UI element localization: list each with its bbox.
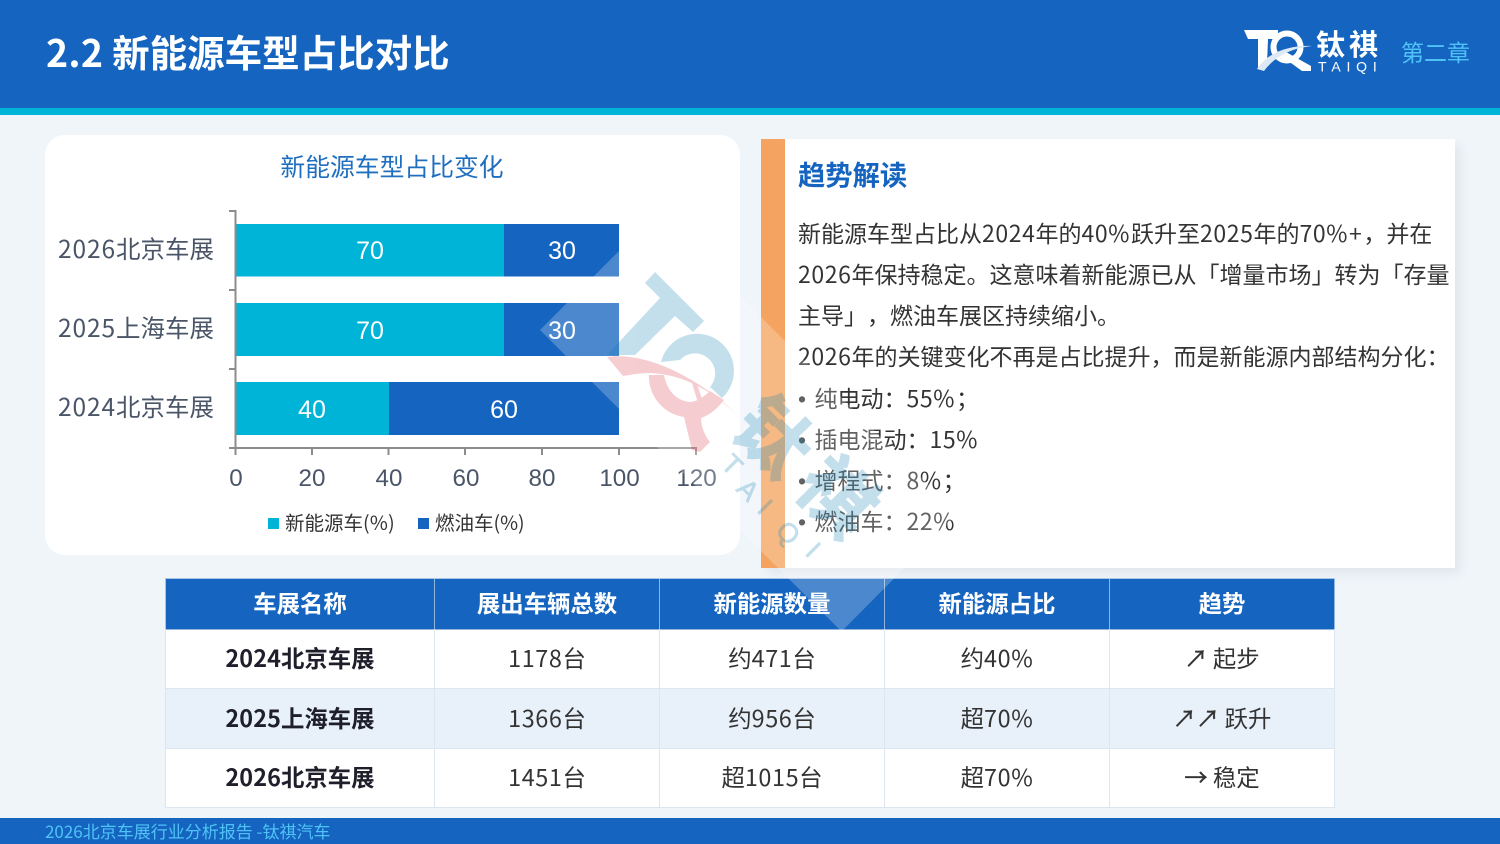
bars <box>236 224 619 435</box>
comparison table: 展出车辆总数 <box>477 584 617 618</box>
comparison table: 956 <box>752 700 792 734</box>
comparison table: 40% <box>984 640 1033 674</box>
chart title: 新能源车型占比变化 <box>280 148 504 184</box>
value axis labels: 100 <box>599 465 640 492</box>
legend: 燃油车(%) <box>435 507 525 536</box>
footer bar <box>0 818 1500 844</box>
comparison table: 2024 <box>225 640 281 674</box>
value axis labels: 20 <box>299 465 325 492</box>
bars: 70 <box>356 237 384 265</box>
trend text block: 2026年保持稳定。这意味着新能源已从「增量市场」转为「存量 <box>798 256 1449 290</box>
logo: TQ 钛祺 <box>1244 24 1383 74</box>
comparison table: 跃升 <box>1225 700 1271 734</box>
trend text block: • 增程式：8%； <box>798 462 966 496</box>
comparison table: 北京车展 <box>281 759 375 793</box>
comparison table: 台 <box>562 700 586 734</box>
bar chart <box>58 148 717 536</box>
trend text block: • 插电混动：15% <box>798 421 979 455</box>
trend text block: 主导」，燃油车展区持续缩小。 <box>798 297 1120 331</box>
watermark: TQ logo: I <box>752 494 778 520</box>
panel: bar chart card <box>45 135 740 555</box>
value axis labels: 80 <box>529 465 555 492</box>
watermark: TQ logo: Q <box>770 515 806 551</box>
comparison table: ↗↗ <box>1173 700 1219 734</box>
watermark: TQ logo: T <box>716 449 748 481</box>
comparison table: 70% <box>984 700 1033 734</box>
comparison table: ↗ <box>1184 640 1208 674</box>
trend text block: 新能源车型占比从2024年的40%跃升至2025年的70%+，并在 <box>798 215 1432 249</box>
comparison table: 超 台 <box>721 759 823 793</box>
comparison table: 1178 <box>508 640 562 674</box>
trend text block <box>798 215 1449 537</box>
comparison table: 约 台 <box>728 640 816 674</box>
comparison table: 北京车展 <box>281 640 375 674</box>
comparison table <box>165 578 1335 808</box>
value axis labels: 120 <box>676 465 717 492</box>
comparison table: 1451 <box>508 759 562 793</box>
category labels: 2024北京车展 <box>58 389 214 424</box>
comparison table: 约 台 <box>728 700 816 734</box>
watermark: TQ logo: I <box>800 537 826 563</box>
comparison table: 1015 <box>745 759 799 793</box>
value axis labels <box>229 465 717 492</box>
comparison table: 1366 <box>508 700 562 734</box>
comparison table: → <box>1184 759 1208 793</box>
watermark: TQ logo: A <box>731 473 765 507</box>
bars: 60 <box>490 396 518 424</box>
trend text block: • 纯电动：55%； <box>798 380 979 414</box>
comparison table: 超 <box>961 700 984 734</box>
title: 2.2 新能源车型占比对比 <box>46 23 450 78</box>
comparison table: 约 <box>961 640 984 674</box>
comparison table: 起步 <box>1213 640 1260 674</box>
header bar <box>0 0 1500 115</box>
category labels: 2026北京车展 <box>58 231 214 266</box>
comparison table: 上海车展 <box>281 700 375 734</box>
comparison table: 台 <box>562 640 586 674</box>
heading: trend: 趋势解读 <box>798 153 907 193</box>
logo: TQ 钛祺: TAIQI <box>1318 58 1383 74</box>
panel: trend interpretation <box>761 139 1455 568</box>
comparison table: 稳定 <box>1213 759 1260 793</box>
value axis labels: 0 <box>229 465 243 492</box>
comparison table: 新能源占比 <box>939 584 1055 618</box>
chapter label: 第二章 <box>1401 34 1470 68</box>
bars: 40 <box>298 396 326 424</box>
comparison table: 70% <box>984 759 1033 793</box>
category labels <box>58 231 214 424</box>
comparison table: 车展名称 <box>253 584 347 618</box>
comparison table: 471 <box>752 640 792 674</box>
watermark: TQ logo: 祺 <box>777 429 905 557</box>
comparison table: 台 <box>562 759 586 793</box>
value axis labels: 40 <box>376 465 402 492</box>
comparison table: 2025 <box>225 700 281 734</box>
comparison table: 超 <box>961 759 984 793</box>
trend text block: • 燃油车：22% <box>798 503 956 537</box>
axes <box>229 211 697 455</box>
footer text: 2026北京车展行业分析报告 -钛祺汽车 <box>45 818 330 843</box>
comparison table: 2026 <box>225 759 281 793</box>
bars: 70 <box>356 317 384 345</box>
comparison table: 新能源数量 <box>714 584 830 618</box>
watermark: TQ logo: 钛 <box>713 369 841 497</box>
trend text block: 2026年的关键变化不再是占比提升，而是新能源内部结构分化： <box>798 338 1449 372</box>
legend <box>268 507 525 536</box>
category labels: 2025上海车展 <box>58 310 214 345</box>
comparison table: 趋势 <box>1199 584 1245 618</box>
legend: 新能源车(%) <box>285 507 395 536</box>
bars: 30 <box>548 237 576 265</box>
bars: 30 <box>548 317 576 345</box>
value axis labels: 60 <box>453 465 479 492</box>
